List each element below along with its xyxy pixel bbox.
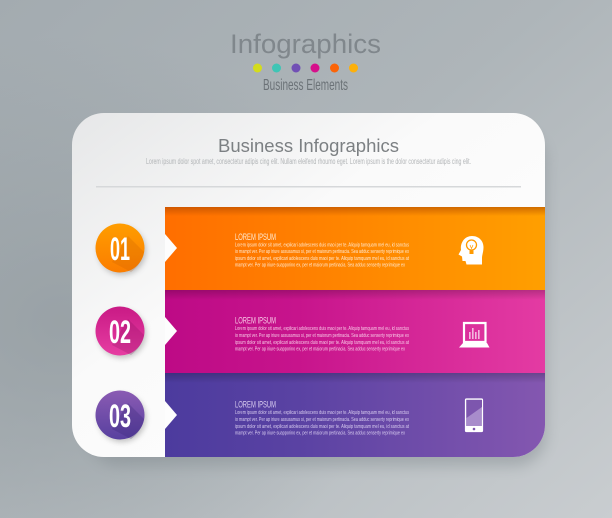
- icon: laptop with chart: [459, 323, 490, 348]
- band: purple: [165, 373, 545, 457]
- panel: main card: [72, 113, 545, 457]
- number badge 03: [96, 390, 146, 442]
- card heading: Business Infographics: [218, 135, 399, 156]
- band: orange: [165, 207, 545, 457]
- band: magenta: [165, 290, 545, 373]
- panel: card shadow: [88, 130, 546, 466]
- subtitle: Business Elements: [263, 77, 348, 94]
- text block 2: ipsum dolor sit amet, explicari adolescens duis maoi per te. Aliquip tamquam mel eu, id sanctus at: [235, 340, 409, 346]
- divider: [96, 186, 521, 188]
- text block 1: io mampt ver. Per ap iriure assusamus si, per et maiorum pertinacia. Sea adduc senserty reprimique ex: [235, 249, 409, 255]
- icon: head with light bulb: [458, 236, 484, 264]
- text block 3: mampt ver. Per ap iriure suapporino ex, per et maiorum pertinacia. Sea adduc senserty reprimique ex: [235, 430, 405, 436]
- number badge 02: [96, 306, 146, 358]
- text block 1: mampt ver. Per ap iriure suapporino ex, per et maiorum pertinacia. Sea adduc senserty reprimique ex: [235, 262, 405, 268]
- text block 2: LOREM IPSUM: [235, 316, 276, 326]
- text block 3: Lorem ipsum dolor sit amet, explicari adolescens duis maoi per te. Aliquip tamquam mel eu, id sanctus: [235, 410, 409, 416]
- text block 3: ipsum dolor sit amet, explicari adolescens duis maoi per te. Aliquip tamquam mel eu, id sanctus at: [235, 424, 409, 430]
- number badge 01: [96, 224, 146, 275]
- text block 2: [235, 316, 409, 352]
- text block 1: ipsum dolor sit amet, explicari adolescens duis maoi per te. Aliquip tamquam mel eu, id sanctus at: [235, 256, 409, 262]
- text block 2: io mampt ver. Per ap iriure assusamus si, per et maiorum pertinacia. Sea adduc senserty reprimique ex: [235, 333, 409, 339]
- number badge 02: 02: [109, 314, 131, 350]
- text block 2: mampt ver. Per ap iriure suapporino ex, per et maiorum pertinacia. Sea adduc senserty reprimique ex: [235, 346, 405, 352]
- text block 1: LOREM IPSUM: [235, 232, 276, 243]
- main title: Infographics: [230, 29, 381, 59]
- number badge 01: 01: [110, 231, 130, 267]
- white pointers: [165, 234, 177, 429]
- text block 2: Lorem ipsum dolor sit amet, explicari adolescens duis maoi per te. Aliquip tamquam mel eu, id sanctus: [235, 326, 409, 332]
- text block 1: Lorem ipsum dolor sit amet, explicari adolescens duis maoi per te. Aliquip tamquam mel eu, id sanctus: [235, 242, 409, 248]
- coloured dots row: [253, 64, 358, 72]
- icon: smartphone: [466, 399, 482, 432]
- text block 3: LOREM IPSUM: [235, 400, 276, 410]
- number badge 03: 03: [109, 398, 131, 434]
- text block 1: [235, 232, 409, 268]
- text block 3: [235, 400, 409, 436]
- text block 3: io mampt ver. Per ap iriure assusamus si, per et maiorum pertinacia. Sea adduc senserty reprimique ex: [235, 417, 409, 423]
